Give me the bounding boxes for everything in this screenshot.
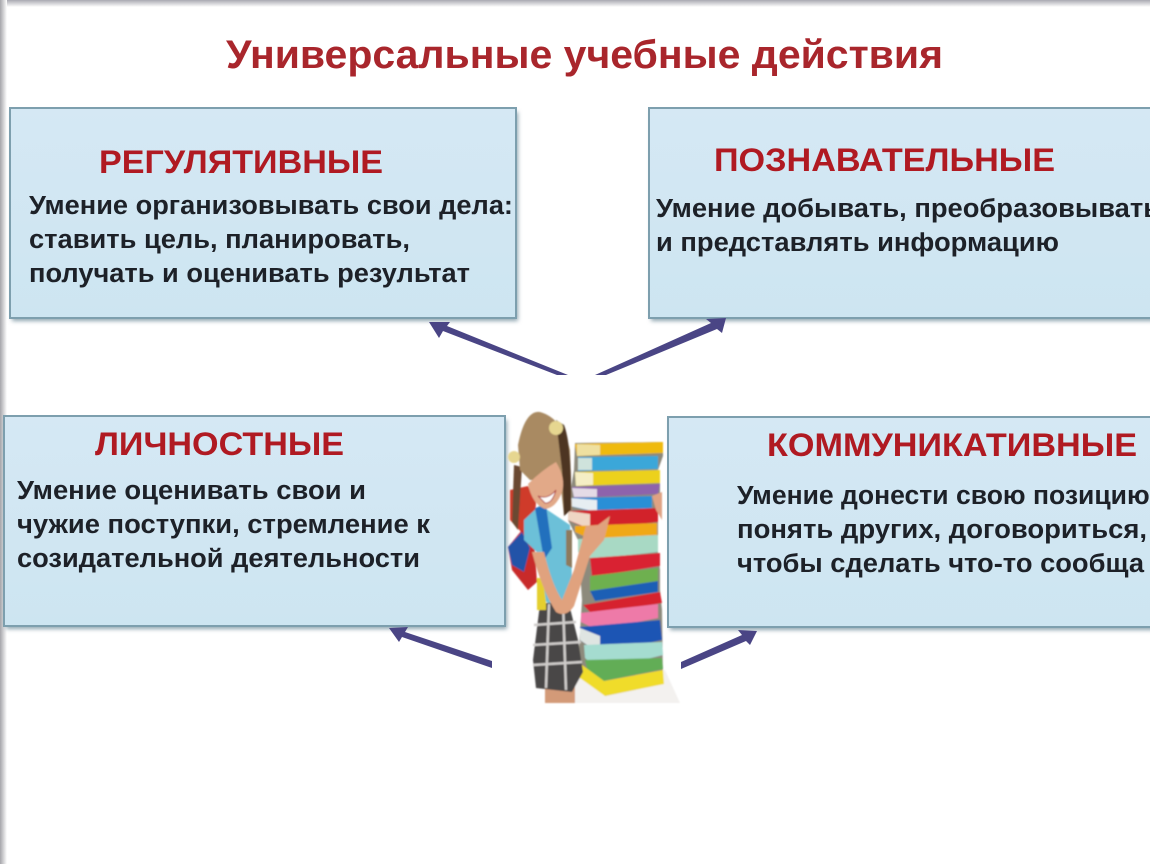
text: коммуникативные description: понять других, договориться, xyxy=(737,516,1147,544)
text: личностные description xyxy=(17,477,430,573)
text: познавательные description xyxy=(656,195,1150,257)
panel: познавательные xyxy=(649,108,1150,321)
arrow: to коммуникативные xyxy=(681,630,757,669)
floor shadow xyxy=(567,670,680,703)
text: регулятивные description: ставить цель, планировать, xyxy=(29,226,410,254)
panel: регулятивные xyxy=(10,108,518,321)
heading: познавательные: ПОЗНАВАТЕЛЬНЫЕ xyxy=(714,142,1055,178)
legs xyxy=(545,686,575,703)
right braid xyxy=(566,530,572,568)
heading: регулятивные: РЕГУЛЯТИВНЫЕ xyxy=(99,144,383,180)
book stack xyxy=(568,442,664,696)
text: регулятивные description: получать и оценивать результат xyxy=(29,260,470,288)
text: познавательные description: Умение добывать, преобразовывать xyxy=(656,195,1150,223)
text: регулятивные description xyxy=(29,192,513,288)
backpack xyxy=(510,486,536,535)
face xyxy=(528,462,563,509)
shirt xyxy=(524,505,572,606)
text: коммуникативные description: чтобы сделать что-то сообща xyxy=(737,550,1145,578)
arrow: to личностные xyxy=(389,627,492,668)
panel: личностные xyxy=(4,416,507,629)
hair flowers xyxy=(549,421,563,435)
text: личностные description: Умение оценивать свои и xyxy=(17,477,366,505)
plaid skirt xyxy=(533,600,583,692)
heading: коммуникативные: КОММУНИКАТИВНЫЕ xyxy=(767,427,1137,463)
heading: личностные: ЛИЧНОСТНЫЕ xyxy=(95,426,344,462)
hair xyxy=(518,412,572,515)
title: Универсальные учебные действия xyxy=(226,33,943,77)
text: регулятивные description: Умение организовывать свои дела: xyxy=(29,192,513,220)
illustration: girl with a stack of books xyxy=(508,412,680,703)
arrow: to познавательные xyxy=(595,318,726,375)
arm and hand xyxy=(532,516,610,614)
text: личностные description: созидательной деятельности xyxy=(17,545,420,573)
arrow: to регулятивные xyxy=(429,322,568,375)
text: коммуникативные description: Умение донести свою позицию, xyxy=(737,482,1150,510)
panel: коммуникативные xyxy=(668,417,1150,630)
text: коммуникативные description xyxy=(737,482,1150,578)
left braid xyxy=(512,465,522,530)
text: познавательные description: и представлять информацию xyxy=(656,229,1059,257)
yellow shirt hem xyxy=(537,578,546,610)
text: личностные description: чужие поступки, стремление к xyxy=(17,511,430,539)
